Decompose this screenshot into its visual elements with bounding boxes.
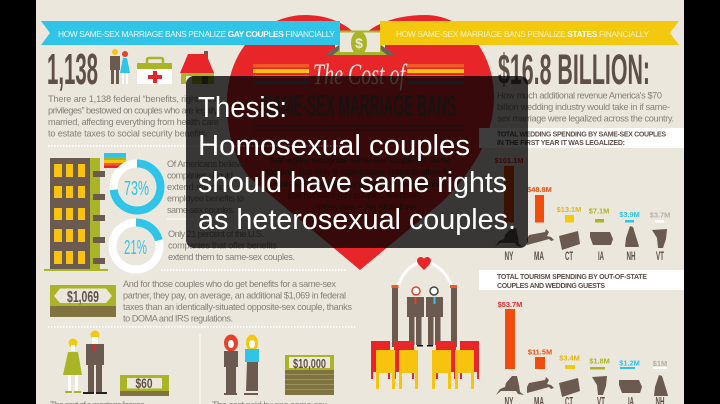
donut chart: 73% (114, 164, 160, 210)
description text: How much additional revenue America's $70 (497, 90, 662, 100)
bar: NH: $3.9M (619, 210, 640, 219)
bar: MA (528, 348, 552, 369)
bar: NH: $1M (653, 359, 667, 368)
text: Americans believe: extend marriage (167, 182, 231, 192)
thesis text (198, 92, 516, 236)
description text: billion wedding industry would take in if same- (497, 102, 670, 112)
money stack: $60 (120, 375, 169, 396)
text: additional federal taxes: to DOMA and IRS regulations. (123, 314, 233, 324)
heart body text: states take a big hit to their (314, 202, 416, 212)
wedding spending chart (479, 128, 684, 263)
woman in olive dress (63, 338, 82, 393)
icon: medical kit (137, 58, 172, 84)
bar: VT: $3.7M (650, 210, 670, 220)
double rule (253, 125, 464, 130)
text: only 21 percent (168, 229, 295, 262)
heart body text: that legally recognize same-sex couples in some (270, 155, 450, 165)
chart title band (479, 128, 684, 148)
columns (392, 285, 457, 347)
chart title band: TOTAL WEDDING SPENDING BY SAME-SEX COUPLES (497, 132, 666, 138)
money stack: $1,069: $1,069 (67, 289, 99, 306)
description text: to estate taxes to social security benefits. (48, 128, 208, 138)
text: additional federal taxes (123, 279, 352, 324)
state labels row: VT (656, 249, 664, 263)
state labels row: NH (626, 249, 636, 263)
heart body text (266, 155, 454, 212)
text: Americans believe: Of Americans believe (167, 159, 245, 169)
bar: CT (557, 205, 581, 222)
money stack: $10,000: $10,000 (293, 356, 326, 371)
text: only 21 percent: extend them to same-sex couples. (168, 252, 295, 262)
state shapes row (496, 375, 668, 397)
bar: CT (559, 354, 580, 369)
bar: MA: $48.8M (527, 185, 552, 194)
text: Americans believe (167, 159, 245, 215)
bar: IA (589, 206, 609, 222)
wedding ceremony illustration (371, 257, 479, 389)
description text: privileges” bestowed on couples who are legally (48, 106, 218, 116)
groom right (426, 287, 443, 346)
donut chart: 21%: 21% (124, 237, 147, 259)
money stack: $1,069 (50, 285, 116, 317)
state labels row (504, 249, 664, 263)
bar: CT: $13.1M (557, 205, 581, 214)
bar: VT (589, 356, 610, 370)
bar: MA: $11.5M (528, 348, 552, 356)
state labels row: CT (565, 249, 573, 263)
donut chart: 73%: 73% (124, 178, 149, 200)
bar: VT: $1.8M (589, 356, 610, 366)
bar: MA (527, 185, 552, 222)
thesis text: as heterosexual couples. (198, 204, 516, 236)
bar: NY (495, 156, 523, 222)
text: Americans believe: companies should (167, 170, 233, 180)
red chairs (371, 341, 479, 379)
bar: NY: $53.7M (498, 300, 522, 309)
description text: sex marriage were legalized across the country. (497, 114, 674, 124)
yellow chairs (376, 350, 474, 389)
thesis text: should have same rights (198, 167, 507, 199)
state labels row: IA (598, 249, 604, 263)
text: additional federal taxes: partner, they pay, on average, an additional $1,069 in federal (123, 290, 346, 300)
chart title band (479, 270, 684, 290)
text: additional federal taxes: And for those couples who do get benefits for a same-sex (123, 279, 336, 289)
woman with red hair (224, 334, 238, 395)
left section: 1,138 statistic: 1,138 (47, 45, 98, 94)
heart on arch (417, 257, 431, 270)
state labels row (504, 394, 664, 404)
description text (48, 94, 220, 138)
chart title band: IN THE FIRST YEAR IT WAS LEGALIZED: (497, 140, 625, 147)
bar: NY: $101.1M (495, 156, 523, 165)
left banner (41, 21, 340, 45)
left section: 1,138 statistic (47, 45, 220, 138)
text: additional federal taxes: taxes than an identically-situated opposite-sex couple, thanks (123, 302, 352, 312)
icon: couple (110, 49, 130, 84)
money stack: $60: $60 (136, 375, 153, 391)
chart title band: COUPLES AND WEDDING GUESTS (497, 283, 605, 290)
right banner (380, 21, 679, 45)
lesbian couple figures (224, 334, 259, 395)
state labels row: MA (534, 249, 544, 263)
chart title band: TOTAL TOURISM SPENDING BY OUT-OF-STATE (497, 274, 647, 281)
thesis text: Thesis: (198, 92, 287, 124)
state labels row: NY (504, 249, 514, 263)
text: Americans believe: same-sex couples. (167, 205, 235, 215)
text: Americans believe: employee benefits to (167, 194, 244, 204)
centre money emblem: $ (355, 35, 363, 51)
bar: IA: $1.2M (619, 358, 640, 368)
straight couple figures (63, 330, 107, 394)
left banner: HOW SAME-SEX MARRIAGE BANS PENALIZE GAY COUPLES FINANCIALLY (58, 29, 335, 39)
thesis overlay panel (186, 76, 528, 248)
arch (398, 261, 452, 287)
dotted divider (48, 145, 350, 147)
man in brown suit (83, 330, 107, 394)
money stack: $10,000 (285, 355, 334, 395)
rainbow stripes right (407, 64, 464, 84)
right section: $16.8 billion (497, 46, 674, 124)
thesis text: Homosexual couples (198, 130, 470, 162)
bar: NY (498, 300, 522, 369)
right banner: HOW SAME-SEX MARRIAGE BANS PENALIZE STATES FINANCIALLY (396, 29, 649, 39)
groom left (407, 287, 424, 346)
woman with blonde hair (244, 334, 259, 395)
bar: CT: $3.4M (559, 354, 580, 362)
heart body text: fashion. But only 8 states have voted to allow full (266, 167, 454, 177)
heart title block (253, 58, 464, 212)
description text: married, affecting everything from health care (48, 117, 219, 127)
heart body text: marriage. The bans on same-sex marriage don't (274, 179, 446, 189)
tourism spending chart (479, 270, 684, 404)
text: only 21 percent: companies that offer benefits (168, 240, 277, 250)
text: SAME-SEX MARRIAGE BANS (263, 88, 456, 123)
centre money emblem (325, 31, 395, 55)
state shapes row (495, 226, 667, 250)
donut chart: 21% (112, 222, 160, 270)
office building icon with flag (44, 153, 126, 271)
rainbow stripes left (253, 64, 309, 84)
heart body text: just penalize gay couples financially— (287, 190, 433, 200)
bar: IA: $7.1M (589, 206, 609, 216)
central red heart (227, 15, 494, 270)
script title: The Cost of (313, 58, 407, 91)
text: only 21 percent: Only 21 percent of the U.S. (168, 229, 264, 239)
icon: house (180, 51, 214, 84)
description text (497, 90, 674, 124)
description text: There are 1,138 federal “benefits, rights and (48, 94, 220, 104)
